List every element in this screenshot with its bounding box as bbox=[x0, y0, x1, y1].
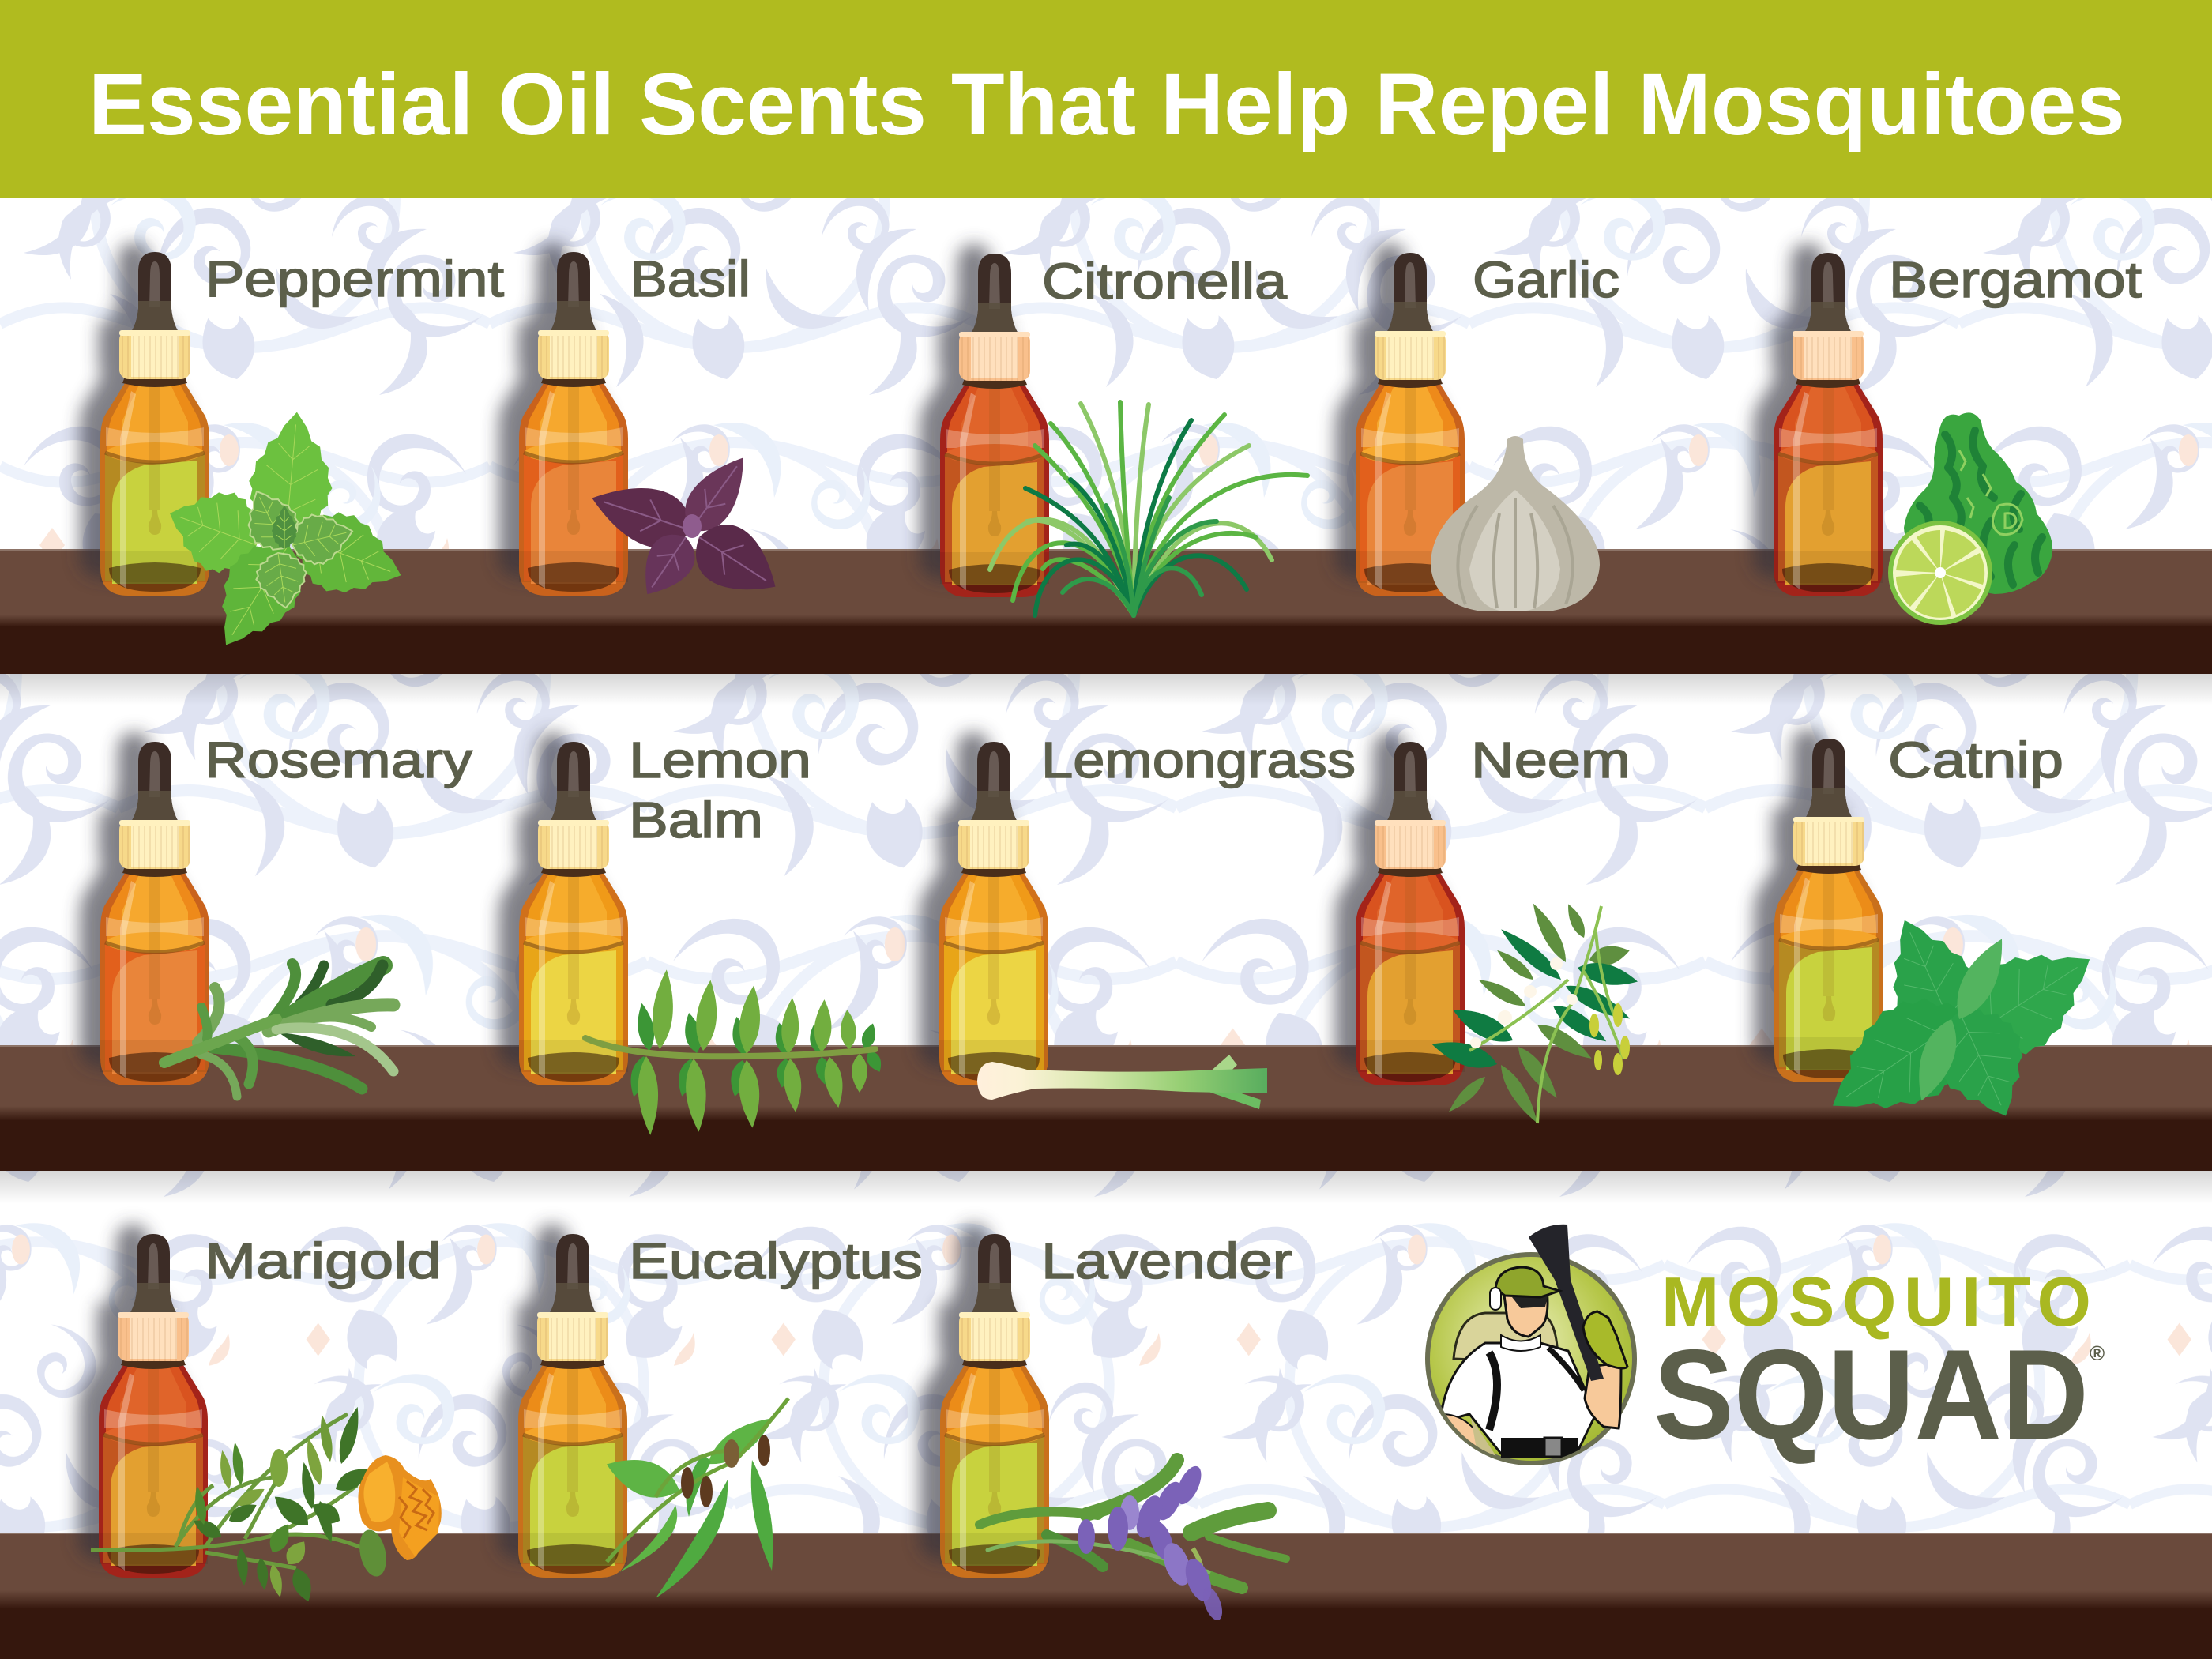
header banner bbox=[0, 0, 2212, 198]
bottle: Citronella bbox=[920, 244, 1049, 597]
item: Lemon Balm bbox=[498, 732, 886, 1136]
plant: lemongrass stalk bbox=[977, 1055, 1267, 1109]
panel: row 2 wallpaper background bbox=[0, 674, 2212, 1045]
item: Garlic bbox=[1335, 243, 1620, 611]
item: Eucalyptus bbox=[498, 1224, 923, 1598]
item: Rosemary bbox=[80, 732, 472, 1097]
item: Basil bbox=[498, 243, 792, 612]
plant: eucalyptus branch bbox=[601, 1398, 788, 1598]
bottle: Rosemary bbox=[80, 732, 209, 1085]
panel: row 1 wallpaper background bbox=[0, 198, 2212, 549]
bottle: Lemongrass bbox=[919, 732, 1048, 1085]
label: Citronella: Citronella bbox=[1042, 253, 1287, 310]
title: Essential Oil Scents That Help Repel Mosquitoes bbox=[88, 56, 2125, 153]
plant: garlic bulb bbox=[1431, 436, 1600, 611]
item: Citronella bbox=[920, 244, 1307, 615]
label: Rosemary: Rosemary bbox=[205, 732, 472, 788]
plant: citronella grass bbox=[990, 402, 1307, 615]
registered mark: ® bbox=[2090, 1341, 2105, 1365]
bottle: Lemon Balm bbox=[498, 732, 628, 1085]
label: Lavender: Lavender bbox=[1041, 1232, 1292, 1289]
logo wordmark: SQUAD: SQUAD bbox=[1653, 1323, 2089, 1466]
shelf 3 bbox=[0, 1533, 2212, 1659]
label: Lemon Balm: Balm bbox=[629, 792, 763, 848]
item: Catnip bbox=[1754, 729, 2116, 1148]
bottle: Marigold bbox=[78, 1224, 208, 1578]
item: Lavender bbox=[920, 1224, 1292, 1623]
label: Peppermint: Peppermint bbox=[205, 250, 504, 307]
shelf 1 bbox=[0, 549, 2212, 674]
plant: rosemary sprig bbox=[164, 964, 393, 1097]
label: Neem: Neem bbox=[1471, 732, 1631, 788]
plant: lemon balm stem bbox=[585, 969, 886, 1136]
logo: Mosquito Squad bbox=[1425, 1224, 2105, 1466]
plant: catnip leaves bbox=[1804, 903, 2116, 1148]
logo badge: mascot in circle bbox=[1425, 1224, 1637, 1465]
bottle: Catnip bbox=[1754, 729, 1883, 1082]
plant: bergamot fruit and slice bbox=[1888, 412, 2052, 625]
bottle: Neem bbox=[1335, 732, 1465, 1085]
plant: purple basil bbox=[583, 445, 792, 612]
label: Marigold: Marigold bbox=[205, 1232, 442, 1289]
bottle: Bergamot bbox=[1753, 243, 1883, 596]
item: Neem bbox=[1335, 732, 1640, 1127]
label: Basil: Basil bbox=[630, 250, 750, 307]
item: Marigold bbox=[78, 1224, 442, 1604]
plant: neem branch bbox=[1429, 900, 1640, 1127]
plant: marigold sprig bbox=[91, 1405, 442, 1604]
panel: row 3 wallpaper background bbox=[0, 1171, 2212, 1533]
shelf 2 bbox=[0, 1045, 2212, 1171]
item: Bergamot bbox=[1753, 243, 2142, 625]
item: Peppermint bbox=[80, 243, 504, 665]
logo wordmark: MOSQUITO: MOSQUITO bbox=[1661, 1262, 2091, 1341]
bottle: Eucalyptus bbox=[498, 1224, 627, 1578]
plant: lavender sprig bbox=[980, 1460, 1286, 1623]
label: Bergamot: Bergamot bbox=[1889, 251, 2142, 308]
label: Catnip: Catnip bbox=[1888, 732, 2063, 788]
bottle: Lavender bbox=[920, 1224, 1049, 1578]
bottle: Basil bbox=[498, 243, 628, 596]
label: Eucalyptus: Eucalyptus bbox=[629, 1232, 923, 1289]
item: Lemongrass bbox=[919, 732, 1356, 1109]
label: Garlic: Garlic bbox=[1473, 251, 1620, 308]
bottle: Garlic bbox=[1335, 243, 1465, 596]
plant: peppermint leaves bbox=[156, 408, 415, 665]
label: Lemon Balm: Lemon bbox=[629, 732, 811, 788]
label: Lemon Balm bbox=[629, 732, 811, 848]
bottle: Peppermint bbox=[80, 243, 209, 596]
label: Lemongrass: Lemongrass bbox=[1041, 732, 1356, 788]
